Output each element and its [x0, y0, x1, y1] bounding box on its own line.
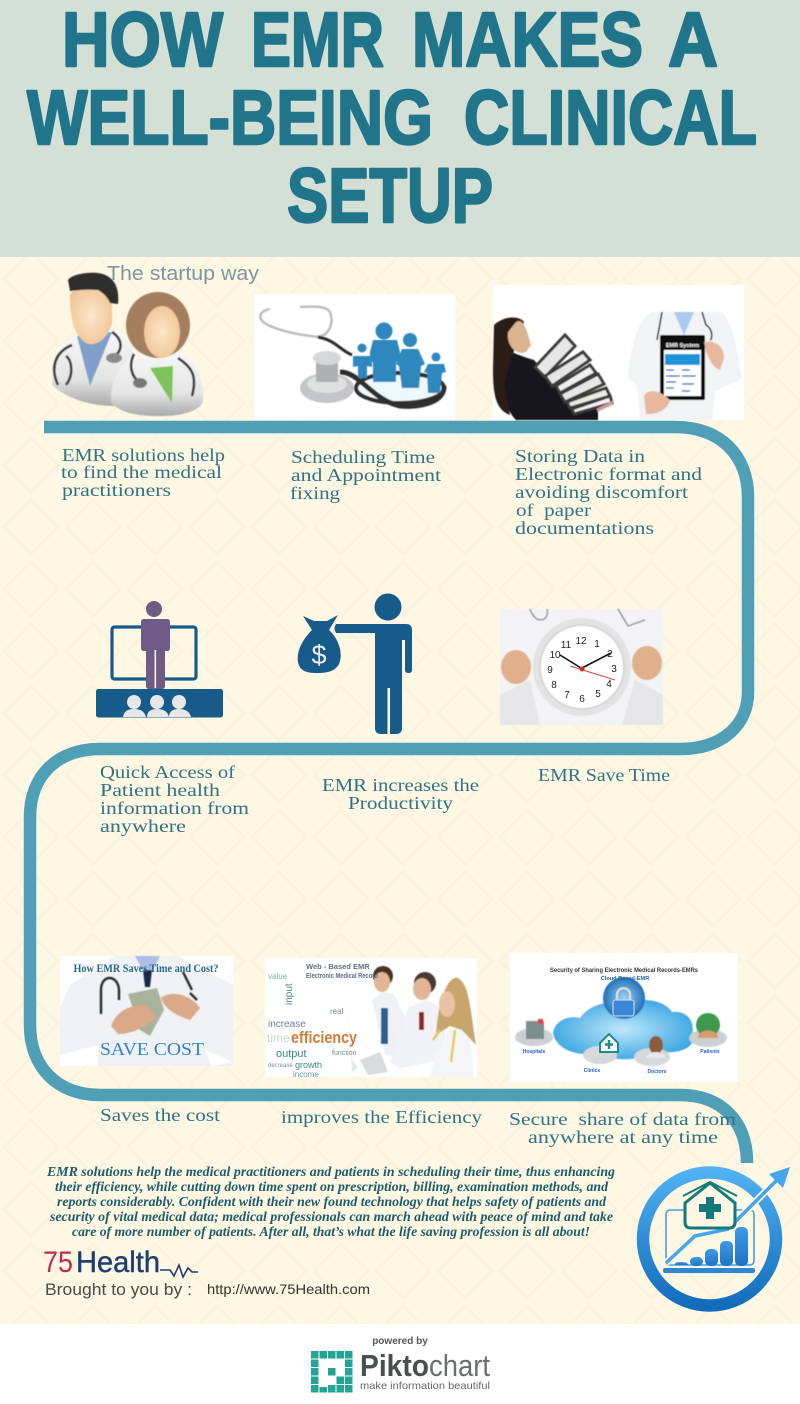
logo: Piktochart wordmark	[360, 1348, 490, 1392]
timeline path	[30, 427, 748, 1163]
label: scheduling	[290, 447, 441, 503]
label: quick access: Quick Access of	[100, 762, 235, 782]
image: efficiency word cloud with doctors	[265, 958, 477, 1079]
image: save cost: SAVE COST	[100, 1039, 204, 1059]
image: secure cloud sharing: Hospitals	[523, 1049, 545, 1055]
label: storing data: Storing Data in	[515, 446, 645, 466]
summary paragraph: reports considerably. Confident with their new found technology that helps safety of patients and	[57, 1195, 607, 1210]
website url: http://www.75Health.com	[207, 1281, 370, 1297]
image: doctor holding clock: 4	[606, 679, 612, 690]
label: quick access: Patient health	[100, 780, 220, 800]
image: efficiency word cloud with doctors: time	[267, 1031, 290, 1045]
image: save cost: How EMR Saves Time and Cost?	[74, 961, 218, 975]
label: find practitioners: practitioners	[62, 480, 171, 500]
label: productivity: Productivity	[348, 793, 453, 813]
image: efficiency word cloud with doctors: efficiency	[291, 1028, 357, 1047]
title: WELL-BEING	[27, 75, 433, 161]
label: scheduling: fixing	[290, 483, 340, 503]
image: doctor holding clock: 10	[549, 650, 561, 661]
label: scheduling: and Appointment	[291, 465, 441, 485]
label: find practitioners	[61, 445, 225, 500]
icon: presenter at screen	[96, 601, 223, 718]
image: efficiency word cloud with doctors: income	[293, 1070, 319, 1079]
logo: Piktochart mark	[311, 1351, 352, 1392]
image: secure cloud sharing: Cloud Based-EMR	[601, 976, 649, 982]
image: efficiency word cloud with doctors: Electronic Medical Record	[306, 971, 378, 980]
logo: 75Health: Health	[76, 1246, 160, 1279]
logo: 75Health	[43, 1246, 198, 1279]
image: secure cloud sharing: Patients	[700, 1049, 720, 1055]
image: efficiency word cloud with doctors: decrease	[268, 1063, 293, 1069]
label: storing data: documentations	[515, 518, 654, 538]
summary paragraph: their efficiency, while cutting down time spent on prescription, billing, examination methods, and	[55, 1180, 609, 1195]
label: storing data	[515, 446, 702, 538]
logo: Piktochart wordmark: Pikto	[360, 1348, 429, 1383]
image: woman with binders and doctor with tablet: EMR System	[666, 343, 699, 349]
label: productivity: EMR increases the	[322, 775, 479, 795]
image: doctor holding clock: 3	[611, 664, 617, 675]
summary paragraph: EMR solutions help the medical practitioners and patients in scheduling their time, thus enhancing	[46, 1165, 615, 1180]
image: doctor holding clock: 9	[547, 665, 553, 676]
label: quick access: anywhere	[100, 816, 186, 836]
image: efficiency word cloud with doctors: input	[284, 983, 295, 1005]
label: quick access	[100, 762, 249, 836]
label: productivity	[322, 775, 479, 813]
logo: Piktochart wordmark: chart	[429, 1348, 490, 1383]
subtitle: The startup way	[107, 263, 259, 285]
image: secure cloud sharing: Doctors	[648, 1069, 667, 1075]
label: secure share: anywhere at any time	[528, 1127, 718, 1147]
image: efficiency word cloud with doctors: value	[268, 972, 288, 981]
label: efficiency: improves the Efficiency	[281, 1107, 482, 1127]
image: secure cloud sharing: Clinics	[584, 1068, 600, 1074]
image: efficiency word cloud with doctors: growth	[295, 1060, 322, 1070]
image: efficiency word cloud with doctors: increase	[268, 1019, 306, 1030]
label: secure share: Secure share of data from	[509, 1109, 736, 1129]
image: secure cloud sharing: Security of Sharing Electronic Medical Records-EMRs	[550, 967, 698, 974]
label: storing data: of paper	[516, 500, 591, 520]
powered by label: powered by	[372, 1336, 428, 1347]
summary paragraph: care of more number of patients. After all, that’s what the life saving profession is all about!	[72, 1225, 590, 1240]
image: efficiency word cloud with doctors: Web - Based EMR	[306, 962, 370, 971]
icon: healthcare growth chart	[643, 1167, 790, 1306]
label: secure share	[509, 1109, 736, 1147]
label: quick access: information from	[100, 798, 249, 818]
logo: 75Health: 75	[43, 1246, 73, 1279]
footer band	[0, 1324, 800, 1404]
logo: Piktochart wordmark: make information beautiful	[360, 1380, 490, 1392]
image: woman with binders and doctor with tablet	[493, 285, 744, 420]
header banner	[0, 0, 800, 257]
image: stethoscope and family	[254, 294, 455, 420]
image: doctor holding clock	[500, 609, 663, 725]
icon: person holding money bag: $	[311, 640, 327, 670]
image: efficiency word cloud with doctors: function	[332, 1050, 357, 1057]
image: doctor holding clock: 7	[564, 690, 570, 701]
title: SETUP	[287, 153, 493, 239]
image: two doctors	[52, 273, 203, 416]
image: save cost	[60, 956, 233, 1066]
image: efficiency word cloud with doctors: output	[276, 1048, 307, 1060]
title	[27, 0, 757, 239]
image: doctor holding clock: 8	[551, 680, 557, 691]
label: storing data: Electronic format and	[515, 464, 702, 484]
image: efficiency word cloud with doctors: real	[330, 1007, 344, 1016]
summary paragraph: security of vital medical data; medical professionals can march ahead with peace of mind and take	[49, 1210, 613, 1225]
label: storing data: avoiding discomfort	[515, 482, 688, 502]
label: save time: EMR Save Time	[538, 765, 670, 785]
image: secure cloud sharing	[510, 953, 738, 1082]
summary paragraph	[46, 1165, 615, 1240]
label: find practitioners: EMR solutions help	[62, 445, 225, 465]
label: saves cost: Saves the cost	[100, 1105, 220, 1125]
label: scheduling: Scheduling Time	[291, 447, 435, 467]
image: doctor holding clock: 1	[594, 639, 600, 650]
image: doctor holding clock: 11	[561, 640, 572, 651]
image: doctor holding clock: 2	[607, 649, 613, 660]
credit line: Brought to you by :	[45, 1280, 192, 1299]
label: find practitioners: to find the medical	[61, 462, 222, 482]
image: doctor holding clock: 12	[575, 636, 587, 647]
image: doctor holding clock: 5	[595, 689, 601, 700]
icon: person holding money bag	[298, 594, 412, 734]
image: doctor holding clock: 6	[579, 694, 585, 705]
